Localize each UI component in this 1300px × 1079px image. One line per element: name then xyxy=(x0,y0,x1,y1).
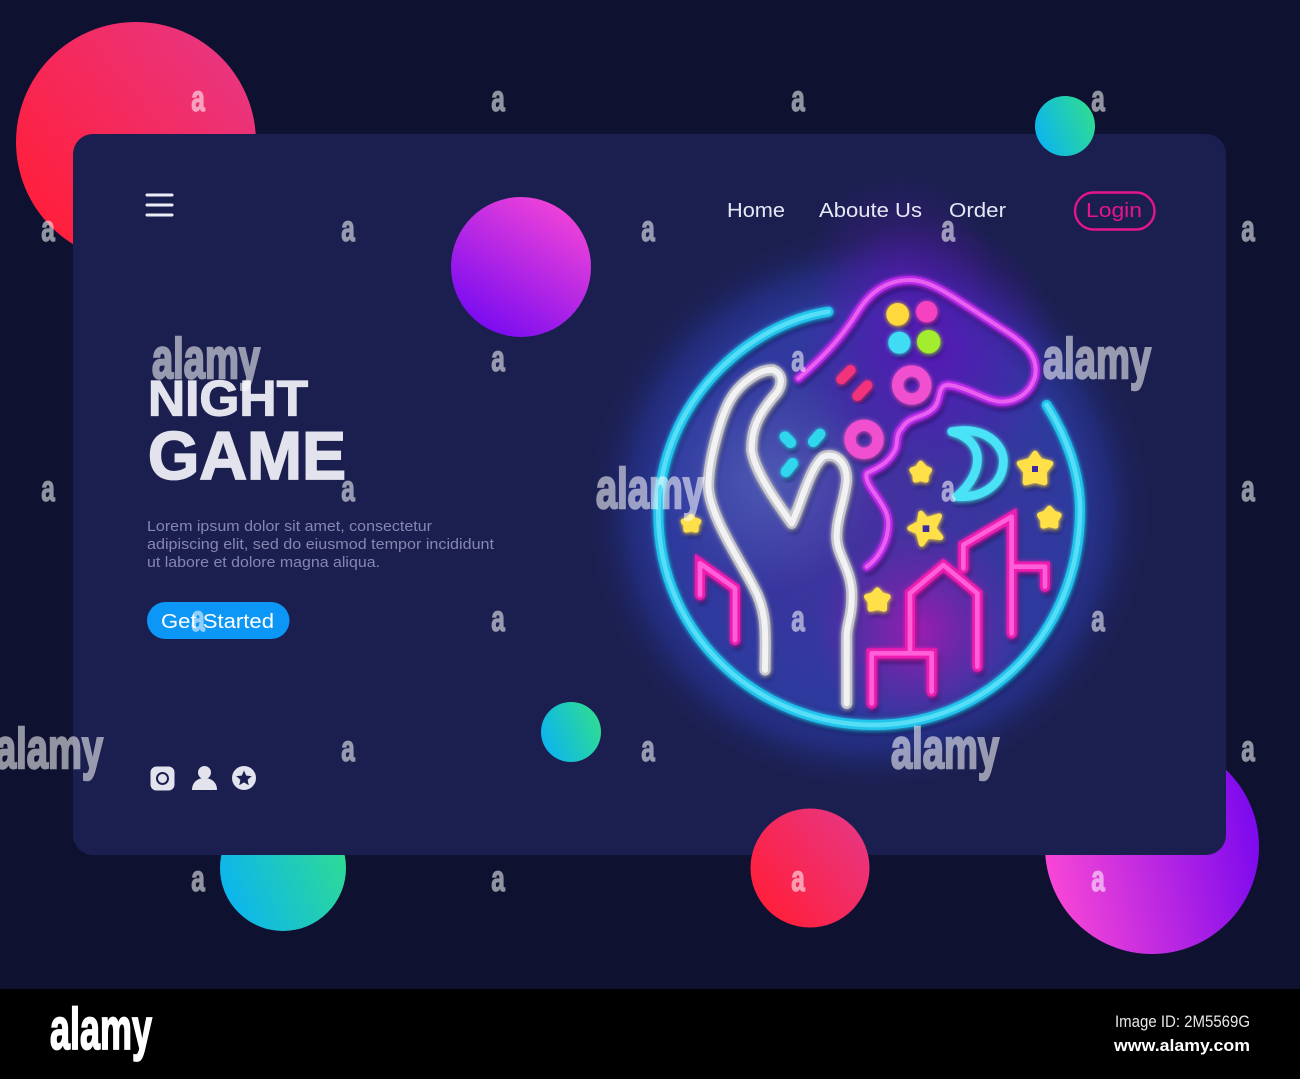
watermark: repeated letter a: a xyxy=(41,468,55,509)
watermark: repeated letter a: a xyxy=(191,78,205,119)
title xyxy=(148,370,346,494)
controller dash buttons xyxy=(841,370,867,396)
navigation: Order xyxy=(949,199,1006,222)
social icons xyxy=(150,766,256,790)
watermark: alamy repeated words: alamy xyxy=(891,717,999,781)
decorative circle: large teal xyxy=(220,805,346,931)
navigation: Home xyxy=(727,199,785,222)
watermark: repeated letter a: a xyxy=(41,208,55,249)
login button: Login xyxy=(1086,199,1142,222)
watermark: repeated letter a: a xyxy=(491,858,505,899)
body text: adipiscing elit, sed do eiusmod tempor incididunt xyxy=(147,537,494,553)
watermark: repeated letter a: a xyxy=(1241,468,1255,509)
neon emblem xyxy=(584,175,1154,785)
watermark: repeated letter a: a xyxy=(1091,78,1105,119)
body text: Lorem ipsum dolor sit amet, consectetur xyxy=(147,519,432,535)
icon: hamburger menu xyxy=(147,195,172,215)
icon: star badge xyxy=(232,766,256,790)
watermark: repeated letter a: a xyxy=(641,208,655,249)
decorative circle: purple xyxy=(451,197,591,337)
icon: person xyxy=(192,766,217,790)
decorative circle: large pink violet xyxy=(1045,740,1259,954)
neon hand xyxy=(708,370,852,703)
watermark: repeated letter a: a xyxy=(191,598,205,639)
navigation xyxy=(727,199,1006,222)
footer image id: Image ID: 2M5569G xyxy=(1115,1012,1250,1031)
title: NIGHT xyxy=(148,370,308,426)
watermark: repeated letter a xyxy=(41,78,1255,899)
star centre holes xyxy=(923,466,1038,532)
watermark: alamy repeated words: alamy xyxy=(1043,327,1151,391)
watermark: repeated letter a: a xyxy=(341,208,355,249)
watermark: repeated letter a: a xyxy=(791,338,805,379)
controller ring buttons xyxy=(850,371,926,453)
watermark: repeated letter a: a xyxy=(1091,858,1105,899)
watermark: repeated letter a: a xyxy=(941,208,955,249)
watermark: repeated letter a: a xyxy=(341,468,355,509)
watermark: repeated letter a: a xyxy=(491,338,505,379)
neon cyan sparks xyxy=(785,434,820,472)
get started button xyxy=(147,602,290,639)
body text: ut labore et dolore magna aliqua. xyxy=(147,555,380,571)
watermark: repeated letter a: a xyxy=(791,858,805,899)
watermark: repeated letter a: a xyxy=(341,728,355,769)
get started button: Get Started xyxy=(161,610,274,633)
watermark: repeated letter a: a xyxy=(491,78,505,119)
watermark: repeated letter a: a xyxy=(1091,598,1105,639)
neon controller outline xyxy=(798,280,1036,567)
decorative circle: large red xyxy=(16,22,256,262)
neon ring xyxy=(658,312,1080,725)
decorative circle: small teal xyxy=(541,702,601,762)
icon: camera xyxy=(150,766,174,790)
watermark: repeated letter a: a xyxy=(1241,208,1255,249)
watermark: repeated letter a: a xyxy=(191,858,205,899)
neon city buildings xyxy=(700,517,1045,703)
footer url: www.alamy.com xyxy=(1113,1036,1250,1055)
controller buttons xyxy=(886,301,940,354)
navigation: Aboute Us xyxy=(819,199,922,222)
watermark: alamy repeated words xyxy=(0,327,1151,781)
title: GAME xyxy=(148,418,346,494)
neon moon xyxy=(952,430,1003,497)
watermark: repeated letter a: a xyxy=(641,728,655,769)
decorative circle: red bottom xyxy=(750,808,870,928)
watermark: repeated letter a: a xyxy=(791,78,805,119)
watermark: repeated letter a: a xyxy=(791,598,805,639)
watermark: alamy repeated words: alamy xyxy=(152,327,260,391)
watermark: repeated letter a: a xyxy=(1241,728,1255,769)
footer logo: alamy xyxy=(50,997,152,1062)
watermark: repeated letter a: a xyxy=(941,468,955,509)
watermark: alamy repeated words: alamy xyxy=(596,457,704,521)
panel: main card xyxy=(73,134,1226,855)
login button xyxy=(1075,192,1154,230)
footer bar xyxy=(0,989,1300,1079)
neon stars xyxy=(683,453,1059,609)
watermark: repeated letter a: a xyxy=(491,598,505,639)
body text xyxy=(147,519,494,571)
emblem glow xyxy=(584,175,1154,785)
decorative circle: top right teal xyxy=(1035,96,1095,156)
